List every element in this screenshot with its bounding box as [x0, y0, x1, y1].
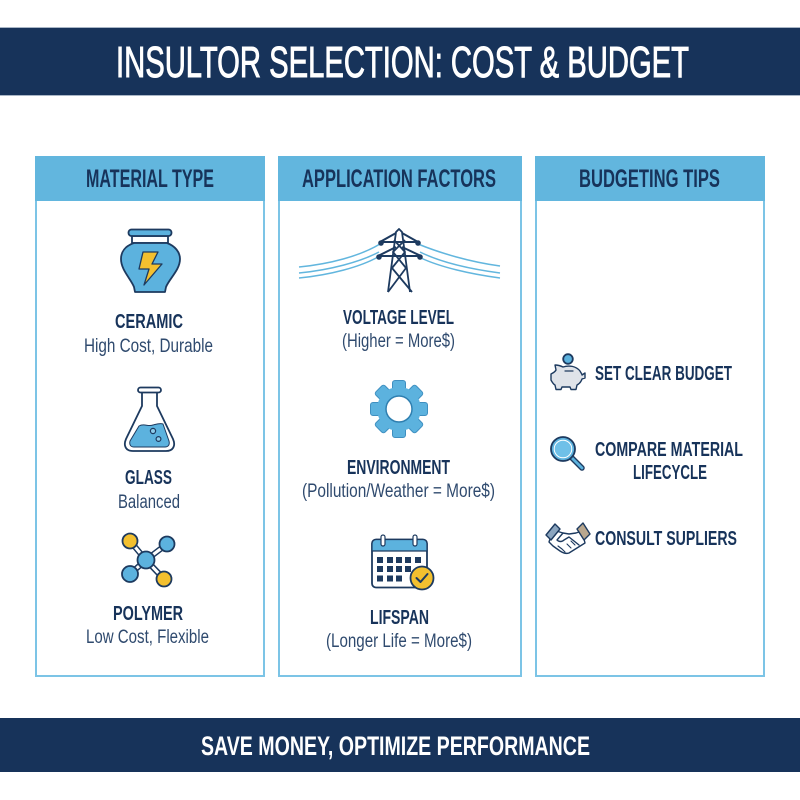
label: glass: Balanced	[118, 492, 180, 513]
icon: magnifying glass	[551, 437, 582, 468]
icon: gear	[370, 380, 428, 438]
footer banner: SAVE MONEY, OPTIMIZE PERFORMANCE	[201, 731, 590, 761]
panel: application factors	[278, 156, 522, 676]
tip: compare material lifecycle: LIFECYCLE	[633, 461, 707, 484]
panel header: budgeting tips	[535, 156, 765, 201]
tip: compare material lifecycle	[551, 437, 743, 484]
icon: polymer molecule	[122, 534, 174, 586]
label: glass: GLASS	[125, 466, 172, 489]
label: lifespan: (Longer Life = More$)	[326, 631, 472, 652]
panel header: application factors: APPLICATION FACTORS	[302, 165, 496, 193]
panel header: application factors	[278, 156, 522, 201]
panel header: material type	[35, 156, 265, 201]
tip: set clear budget	[551, 354, 732, 390]
footer banner	[0, 718, 800, 772]
label: ceramic: High Cost, Durable	[84, 336, 213, 357]
label: voltage level: (Higher = More$)	[342, 331, 455, 352]
label: ceramic: CERAMIC	[115, 310, 183, 333]
tip: consult suppliers	[546, 523, 737, 553]
label: polymer: POLYMER	[113, 602, 183, 625]
label: environment	[302, 456, 495, 502]
label: environment: ENVIRONMENT	[347, 456, 450, 479]
icon: glass flask	[125, 388, 174, 451]
panel: budgeting tips	[535, 156, 765, 676]
panel header: material type: MATERIAL TYPE	[86, 165, 214, 193]
icon: calendar with check badge	[372, 535, 434, 590]
panel header: budgeting tips: BUDGETING TIPS	[579, 165, 720, 193]
label: voltage level: VOLTAGE LEVEL	[343, 306, 454, 329]
label: polymer: Low Cost, Flexible	[86, 627, 209, 648]
panel: material type	[35, 156, 265, 676]
label: voltage level	[342, 306, 455, 352]
label: ceramic	[84, 310, 213, 357]
label: environment: (Pollution/Weather = More$)	[302, 481, 495, 502]
icon: piggy bank with coin	[551, 354, 585, 390]
tip: set clear budget: SET CLEAR BUDGET	[595, 362, 732, 385]
label: polymer	[86, 602, 209, 648]
icon: transmission tower with power lines	[299, 229, 500, 292]
icon: ceramic jar with lightning bolt	[121, 230, 180, 292]
label: lifespan	[326, 606, 472, 652]
label: glass	[118, 466, 180, 513]
icon: handshake	[546, 523, 590, 553]
label: lifespan: LIFSPAN	[370, 606, 429, 629]
title banner	[0, 28, 800, 96]
tip: consult suppliers: CONSULT SUPLIERS	[595, 527, 737, 550]
